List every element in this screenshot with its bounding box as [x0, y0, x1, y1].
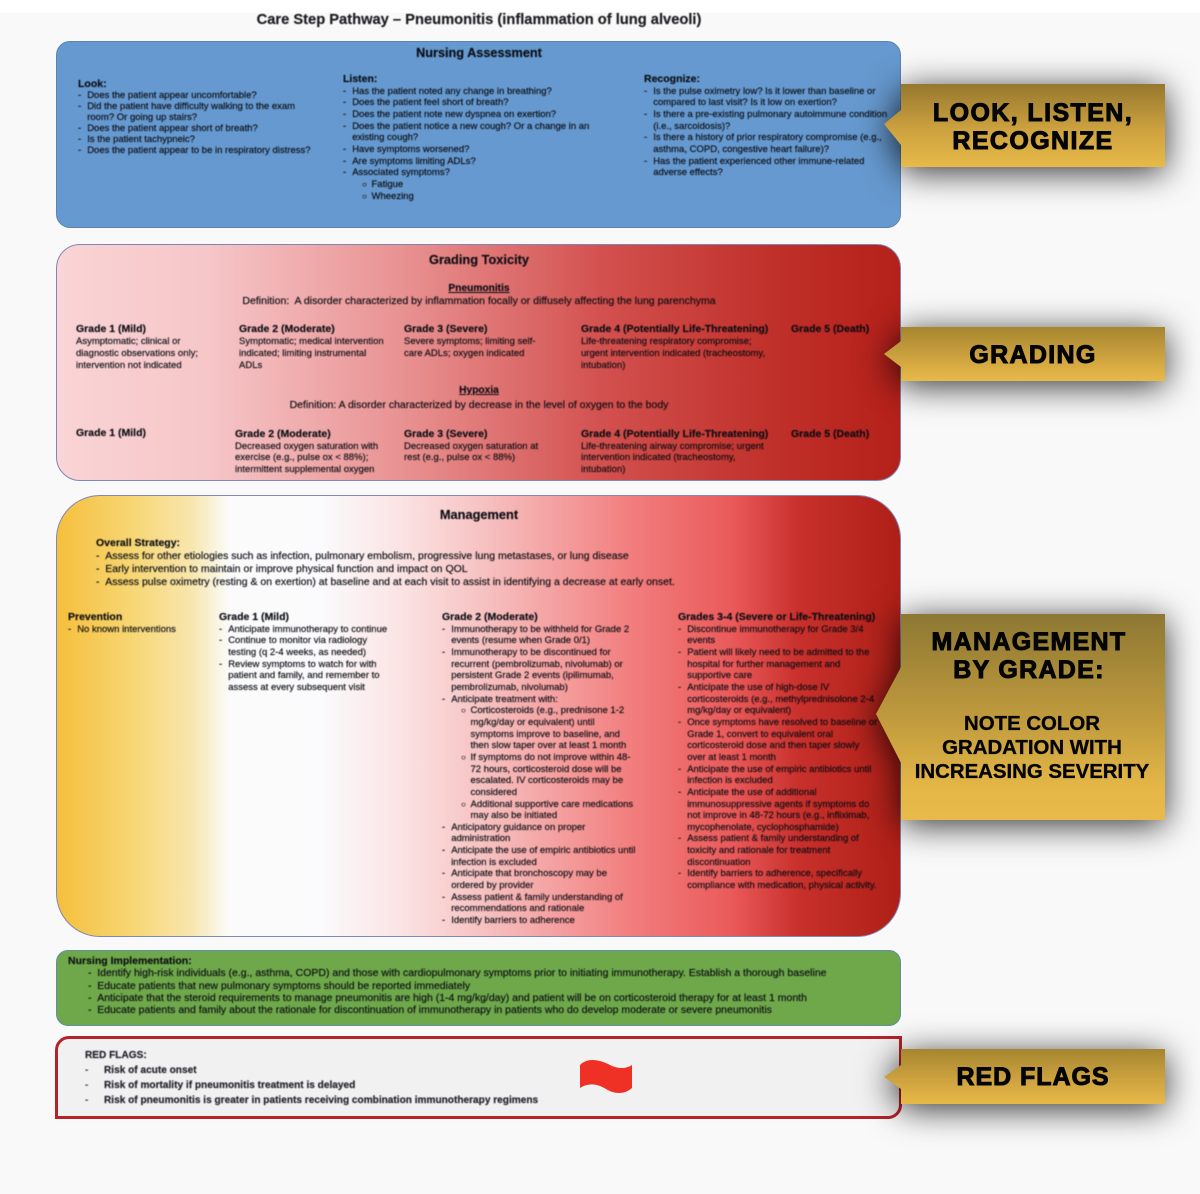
top white strip: [0, 0, 1200, 13]
text block: pneumonitis grade 3: Severe symptoms; limiting self-: [404, 336, 535, 347]
text block: listen: -: [343, 156, 346, 167]
text block: management grade 2: symptoms improve to baseline, and: [470, 729, 620, 740]
text block: management grades 3-4: Grade 1, convert to equivalent oral: [687, 729, 833, 740]
text block: management grades 3-4: supportive care: [687, 670, 752, 681]
text block: management grade 2: Immunotherapy to be discontinued for: [451, 647, 611, 658]
text block: red flags: -: [85, 1095, 88, 1106]
text block: management grade 1: Anticipate immunotherapy to continue: [228, 624, 387, 635]
text block: management grades 3-4: Anticipate the use of additional: [687, 787, 817, 798]
text block: pneumonitis grade 4: Life-threatening respiratory compromise;: [581, 336, 752, 347]
text block: pneumonitis grade 4: [580, 323, 769, 371]
text block: red flags: Risk of acute onset: [104, 1065, 197, 1076]
text block: management grade 2: Identify barriers to adherence: [451, 915, 575, 926]
text block: management grade 1: -: [219, 624, 222, 635]
arrow: management by grade: [856, 591, 1193, 853]
text block: prevention: [68, 611, 176, 635]
text block: overall strategy: Assess for other etiologies such as infection, pulmonary embolism, progressive lung metastases, or lung disease: [105, 550, 629, 562]
text block: look: -: [78, 101, 81, 112]
text block: management grades 3-4: -: [678, 624, 681, 635]
text block: management grade 2: 72 hours, corticosteroid dose will be: [470, 764, 622, 775]
text block: management grades 3-4: hospital for further management and: [687, 659, 840, 670]
text block: look: room? Or going up stairs?: [87, 112, 197, 123]
label: management by grade: [932, 628, 1126, 684]
text block: management grade 1: Grade 1 (Mild): [219, 611, 289, 623]
text block: management grades 3-4: corticosteroid dose and then taper slowly: [687, 740, 859, 751]
text block: management grade 2: may also be initiated: [470, 810, 557, 821]
text block: management grade 1: Review symptoms to watch for with: [228, 659, 377, 670]
text block: management grades 3-4: Anticipate the use of high-dose IV: [687, 682, 829, 693]
text block: management grade 1: assess at every subsequent visit: [228, 682, 365, 693]
text block: prevention: Prevention: [68, 611, 122, 623]
label: note color gradation: GRADATION WITH: [942, 737, 1122, 759]
text block: listen: Fatigue: [372, 179, 403, 190]
text block: management grade 2: Additional supportive care medications: [470, 798, 633, 810]
text block: overall strategy: [96, 537, 675, 588]
text block: management grade 1: [218, 611, 388, 693]
text block: management grade 2: mg/kg/day or equivalent) until: [470, 717, 595, 728]
label: look, listen, recognize: LOOK, LISTEN,: [933, 99, 1133, 127]
text block: recognize: Has the patient experienced other immune-related: [653, 156, 864, 167]
text block: pneumonitis grade 4: Grade 4 (Potentially Life-Threatening): [581, 323, 768, 335]
text block: recognize: adverse effects?: [653, 167, 723, 178]
text block: management grade 2: Grade 2 (Moderate): [442, 611, 538, 623]
text block: management grades 3-4: [678, 611, 878, 891]
text block: hypoxia grade 4: intubation): [581, 464, 625, 475]
text block: management grade 1: testing (q 2-4 weeks, as needed): [228, 647, 366, 658]
text block: overall strategy: -: [96, 576, 100, 588]
text block: look: Is the patient tachypneic?: [87, 134, 195, 145]
text block: red flags: -: [85, 1065, 88, 1076]
text block: management grades 3-4: toxicity and rationale for treatment: [687, 845, 830, 856]
text block: hypoxia definition: Definition: A disorder characterized by decrease in the level of oxygen to the body: [290, 399, 668, 411]
text block: management grade 2: Assess patient & family understanding of: [451, 892, 623, 903]
text block: listen: -: [343, 144, 346, 155]
text block: nursing implementation: -: [88, 980, 92, 992]
text block: management grades 3-4: mg/kg/day or equivalent): [687, 705, 791, 716]
text block: management grades 3-4: not improve in 48-72 hours (e.g., infliximab,: [687, 810, 869, 821]
text block: management grade 2: -: [442, 624, 445, 635]
text block: pneumonitis grade 4: urgent intervention indicated (tracheostomy,: [581, 348, 765, 359]
text block: recognize: Is there a history of prior respiratory compromise (e.g.,: [653, 132, 882, 143]
label: grading: GRADING: [969, 341, 1097, 369]
text block: red flags: Risk of pneumonitis is greater in patients receiving combination immunotherapy regimens: [104, 1095, 538, 1106]
text block: overall strategy: -: [96, 563, 100, 575]
text block: management grades 3-4: Discontinue immunotherapy for Grade 3/4: [687, 624, 864, 635]
text block: management grades 3-4: -: [678, 868, 681, 879]
text block: hypoxia grade 3: Decreased oxygen saturation at: [404, 441, 538, 452]
text block: listen: -: [343, 109, 346, 120]
text block: listen: Listen:: [343, 73, 377, 85]
text block: pneumonitis grade 1: diagnostic observations only;: [76, 348, 198, 359]
text block: management grade 2: -: [442, 868, 445, 879]
label: red flags: RED FLAGS: [956, 1063, 1110, 1091]
text block: management grades 3-4: mycophenolate, cyclophosphamide): [687, 822, 839, 833]
text block: listen: Have symptoms worsened?: [352, 144, 469, 155]
text block: management grades 3-4: immunosuppressive agents if symptoms do: [687, 798, 869, 810]
text block: management grades 3-4: Anticipate the use of empiric antibiotics until: [687, 764, 871, 775]
text block: management grade 2: ordered by provider: [451, 880, 534, 891]
label: management by grade: MANAGEMENT: [932, 628, 1126, 656]
text block: pneumonitis grade 5: Grade 5 (Death): [791, 323, 869, 335]
text block: look: -: [78, 90, 81, 101]
label: management by grade: BY GRADE:: [953, 656, 1105, 684]
text block: management grade 2: recurrent (pembrolizumab, nivolumab) or: [451, 659, 623, 670]
text block: look: Did the patient have difficulty walking to the exam: [87, 101, 295, 112]
text block: listen: Wheezing: [372, 191, 414, 202]
text block: pneumonitis grade 2: ADLs: [239, 360, 262, 371]
text block: management grade 1: patient and family, and remember to: [228, 670, 380, 681]
text block: recognize: Is the pulse oximetry low? Is it lower than baseline or: [653, 86, 876, 97]
text block: listen: Associated symptoms?: [352, 167, 450, 178]
panel: red flags: [55, 1036, 902, 1119]
text block: look: Does the patient appear short of breath?: [87, 123, 258, 134]
text block: recognize: (i.e., sarcoidosis)?: [653, 121, 730, 132]
text block: listen: Has the patient noted any change in breathing?: [352, 86, 552, 97]
text block: management grade 2: [442, 611, 636, 926]
text block: management grades 3-4: -: [678, 682, 681, 693]
heading: nursing assessment: Nursing Assessment: [416, 46, 542, 60]
text block: pneumonitis grade 2: indicated; limiting instrumental: [239, 348, 366, 359]
text block: pneumonitis grade 1: [75, 323, 198, 371]
text block: management grade 2: administration: [451, 833, 510, 844]
text block: management grade 2: Anticipatory guidance on proper: [451, 822, 585, 833]
heading: hypoxia: Hypoxia: [459, 385, 499, 396]
text block: hypoxia grade 5: Grade 5 (Death): [791, 428, 869, 440]
text block: pneumonitis grade 3: care ADLs; oxygen indicated: [404, 348, 524, 359]
arrow: grading: [869, 304, 1192, 414]
text block: hypoxia grade 4: [580, 428, 769, 475]
text block: management grade 2: If symptoms do not improve within 48-: [470, 752, 630, 763]
text block: listen: Are symptoms limiting ADLs?: [352, 156, 476, 167]
text block: management grade 2: considered: [470, 787, 517, 798]
text block: pneumonitis grade 2: Grade 2 (Moderate): [239, 323, 335, 335]
text block: look: Does the patient appear uncomfortable?: [87, 90, 257, 101]
text block: recognize: asthma, COPD, congestive heart failure)?: [653, 144, 829, 155]
text block: management grade 2: -: [442, 647, 445, 658]
text block: red flags: -: [85, 1080, 88, 1091]
text block: overall strategy: Assess pulse oximetry (resting & on exertion) at baseline and at each visit to assist in identifying a decrease at early onset.: [105, 576, 675, 588]
text block: management grade 2: ○: [461, 706, 466, 715]
text block: look: -: [78, 123, 81, 134]
heading: grading toxicity: Grading Toxicity: [429, 252, 529, 267]
text block: overall strategy: Early intervention to maintain or improve physical function and impact on QOL: [105, 563, 468, 575]
heading: pneumonitis: Pneumonitis: [448, 283, 510, 294]
text block: look: Look:: [78, 78, 107, 90]
text block: management grades 3-4: compliance with medication, physical activity.: [687, 880, 877, 891]
text block: listen: ○: [362, 180, 367, 189]
text block: recognize: -: [644, 132, 647, 143]
text block: management grade 2: escalated. IV corticosteroids may be: [470, 775, 623, 786]
text block: pneumonitis grade 3: Grade 3 (Severe): [404, 323, 487, 335]
text block: management grades 3-4: -: [678, 764, 681, 775]
text block: listen: ○: [362, 192, 367, 201]
text block: management grades 3-4: -: [678, 647, 681, 658]
text block: management grade 2: -: [442, 694, 445, 705]
text block: hypoxia grade 2: Decreased oxygen saturation with: [235, 441, 378, 452]
text block: management grade 1: -: [219, 659, 222, 670]
text block: management grades 3-4: over at least 1 month: [687, 752, 776, 763]
text block: pneumonitis grade 3: [404, 323, 536, 359]
panel: management: [56, 495, 901, 937]
text block: listen: -: [343, 86, 346, 97]
text block: nursing implementation: -: [88, 992, 92, 1004]
text block: management grade 2: Corticosteroids (e.g., prednisone 1-2: [470, 705, 624, 716]
text block: hypoxia grade 1: Grade 1 (Mild): [76, 427, 146, 439]
text block: management grades 3-4: events: [687, 635, 715, 646]
title: Care Step Pathway – Pneumonitis (inflammation of lung alveoli): [257, 12, 701, 28]
text block: nursing implementation: Educate patients that new pulmonary symptoms should be reported immediately: [97, 980, 470, 992]
text block: management grades 3-4: Grades 3-4 (Severe or Life-Threatening): [678, 611, 875, 623]
text block: listen: Does the patient feel short of breath?: [352, 97, 509, 108]
text block: nursing implementation: -: [88, 1004, 92, 1016]
heading: management: Management: [440, 507, 518, 522]
text block: hypoxia grade 2: Grade 2 (Moderate): [235, 428, 331, 440]
text block: management grade 1: Continue to monitor via radiology: [228, 635, 367, 646]
text block: management grade 2: Immunotherapy to be withheld for Grade 2: [451, 624, 629, 635]
label: look, listen, recognize: RECOGNIZE: [952, 127, 1114, 155]
panel: nursing implementation: [56, 950, 901, 1026]
text block: prevention: -: [68, 624, 71, 635]
text block: management grades 3-4: discontinuation: [687, 857, 751, 868]
text block: hypoxia grade 2: exercise (e.g., pulse ox < 88%);: [235, 452, 368, 463]
text block: recognize: compared to last visit? Is it low on exertion?: [653, 97, 837, 108]
text block: pneumonitis grade 1: Asymptomatic; clinical or: [76, 336, 181, 347]
text block: listen: -: [343, 167, 346, 178]
text block: management grade 2: pembrolizumab, nivolumab): [451, 682, 568, 693]
text block: nursing implementation: Nursing Implementation:: [68, 955, 192, 967]
text block: management grades 3-4: -: [678, 787, 681, 798]
text block: overall strategy: -: [96, 550, 100, 562]
text block: management grade 2: infection is excluded: [451, 857, 537, 868]
text block: pneumonitis definition: Definition: A disorder characterized by inflammation focally or diffusely affecting the lung parenchyma: [242, 295, 716, 307]
text block: nursing implementation: [68, 955, 827, 1016]
text block: management grades 3-4: Patient will likely need to be admitted to the: [687, 647, 869, 658]
text block: hypoxia grade 3: rest (e.g., pulse ox < 88%): [404, 452, 515, 463]
text block: recognize: Recognize:: [644, 73, 700, 85]
text block: management grades 3-4: -: [678, 833, 681, 844]
text block: recognize: Is there a pre-existing pulmonary autoimmune condition: [653, 109, 887, 120]
arrow: red flags: [867, 1026, 1192, 1137]
text block: look: -: [78, 145, 81, 156]
text block: pneumonitis grade 2: Symptomatic; medical intervention: [239, 336, 384, 347]
text block: pneumonitis grade 4: intubation): [581, 360, 625, 371]
text block: nursing implementation: -: [88, 967, 92, 979]
label: note color gradation: NOTE COLOR: [964, 713, 1100, 735]
text block: management grade 2: Anticipate that bronchoscopy may be: [451, 868, 607, 879]
text block: nursing implementation: Identify high-risk individuals (e.g., asthma, COPD) and those with cardiopulmonary symptoms prior to initiating immunotherapy. Establish a thorough baseline: [97, 967, 827, 979]
label: note color gradation: INCREASING SEVERITY: [915, 761, 1149, 783]
text block: management grades 3-4: corticosteroids (e.g., methylprednisolone 2-4: [687, 694, 874, 705]
text block: management grades 3-4: -: [678, 717, 681, 728]
text block: listen: Does the patient note new dyspnea on exertion?: [352, 109, 556, 120]
text block: listen: [342, 73, 590, 202]
text block: management grade 1: -: [219, 635, 222, 646]
text block: nursing implementation: Educate patients and family about the rationale for discontinuation of immunotherapy in patients who do develop moderate or severe pneumonitis: [97, 1004, 772, 1016]
text block: hypoxia grade 4: Life-threatening airway compromise; urgent: [581, 441, 764, 452]
text block: management grades 3-4: Assess patient & family understanding of: [687, 833, 859, 844]
text block: pneumonitis grade 1: Grade 1 (Mild): [76, 323, 146, 335]
text block: management grade 2: events (resume when Grade 0/1): [451, 635, 590, 646]
text block: nursing implementation: Anticipate that the steroid requirements to manage pneumonitis are high (1-4 mg/kg/day) and patient will be on corticosteroid therapy for at least 1 month: [97, 992, 807, 1004]
text block: management grade 2: -: [442, 915, 445, 926]
text block: management grade 2: Anticipate the use of empiric antibiotics until: [451, 845, 635, 856]
text block: management grade 2: -: [442, 892, 445, 903]
text block: management grades 3-4: infection is excluded: [687, 775, 773, 786]
text block: management grade 2: -: [442, 822, 445, 833]
text block: management grade 2: Anticipate treatment with:: [451, 694, 558, 705]
text block: recognize: -: [644, 109, 647, 120]
text block: hypoxia grade 3: Grade 3 (Severe): [404, 428, 487, 440]
text block: listen: -: [343, 97, 346, 108]
text block: hypoxia grade 4: Grade 4 (Potentially Life-Threatening): [581, 428, 768, 440]
icon: red flag: [580, 1060, 632, 1093]
label: note color gradation: [915, 713, 1150, 783]
text block: listen: -: [343, 121, 346, 132]
text block: overall strategy: Overall Strategy:: [96, 537, 180, 549]
text block: look: Does the patient appear to be in respiratory distress?: [87, 145, 311, 156]
panel: nursing assessment: [56, 41, 901, 228]
text block: pneumonitis grade 1: intervention not indicated: [76, 360, 182, 371]
text block: hypoxia grade 3: [404, 428, 539, 463]
panel: grading toxicity: [56, 244, 901, 481]
text block: hypoxia grade 2: intermittent supplemental oxygen: [235, 464, 374, 475]
text block: management grade 2: -: [442, 845, 445, 856]
arrow: look, listen, recognize: [866, 61, 1193, 200]
text block: management grade 2: ○: [461, 753, 466, 762]
text block: red flags: Risk of mortality if pneumonitis treatment is delayed: [104, 1080, 355, 1091]
text block: management grade 2: ○: [461, 800, 466, 808]
text block: management grades 3-4: Once symptoms have resolved to baseline or: [687, 717, 877, 728]
text block: recognize: [644, 73, 888, 178]
text block: red flags: [84, 1050, 538, 1106]
text block: management grade 2: recommendations and rationale: [451, 903, 584, 914]
text block: management grade 2: then slow taper over at least 1 month: [470, 740, 626, 751]
text block: recognize: -: [644, 156, 647, 167]
text block: look: -: [78, 134, 81, 145]
text block: hypoxia grade 2: [234, 428, 378, 475]
text block: listen: existing cough?: [352, 132, 418, 143]
text block: red flags: RED FLAGS:: [85, 1050, 147, 1061]
text block: hypoxia grade 4: intervention indicated (tracheostomy,: [581, 452, 736, 463]
text block: management grade 2: persistent Grade 2 events (ipilimumab,: [451, 670, 614, 681]
text block: prevention: No known interventions: [77, 624, 176, 635]
text block: listen: Does the patient notice a new cough? Or a change in an: [352, 121, 589, 132]
text block: recognize: -: [644, 86, 647, 97]
text block: look: [78, 78, 311, 156]
text block: management grades 3-4: Identify barriers to adherence, specifically: [687, 868, 862, 879]
label: look, listen, recognize: [933, 99, 1133, 155]
text block: pneumonitis grade 2: [238, 323, 384, 371]
